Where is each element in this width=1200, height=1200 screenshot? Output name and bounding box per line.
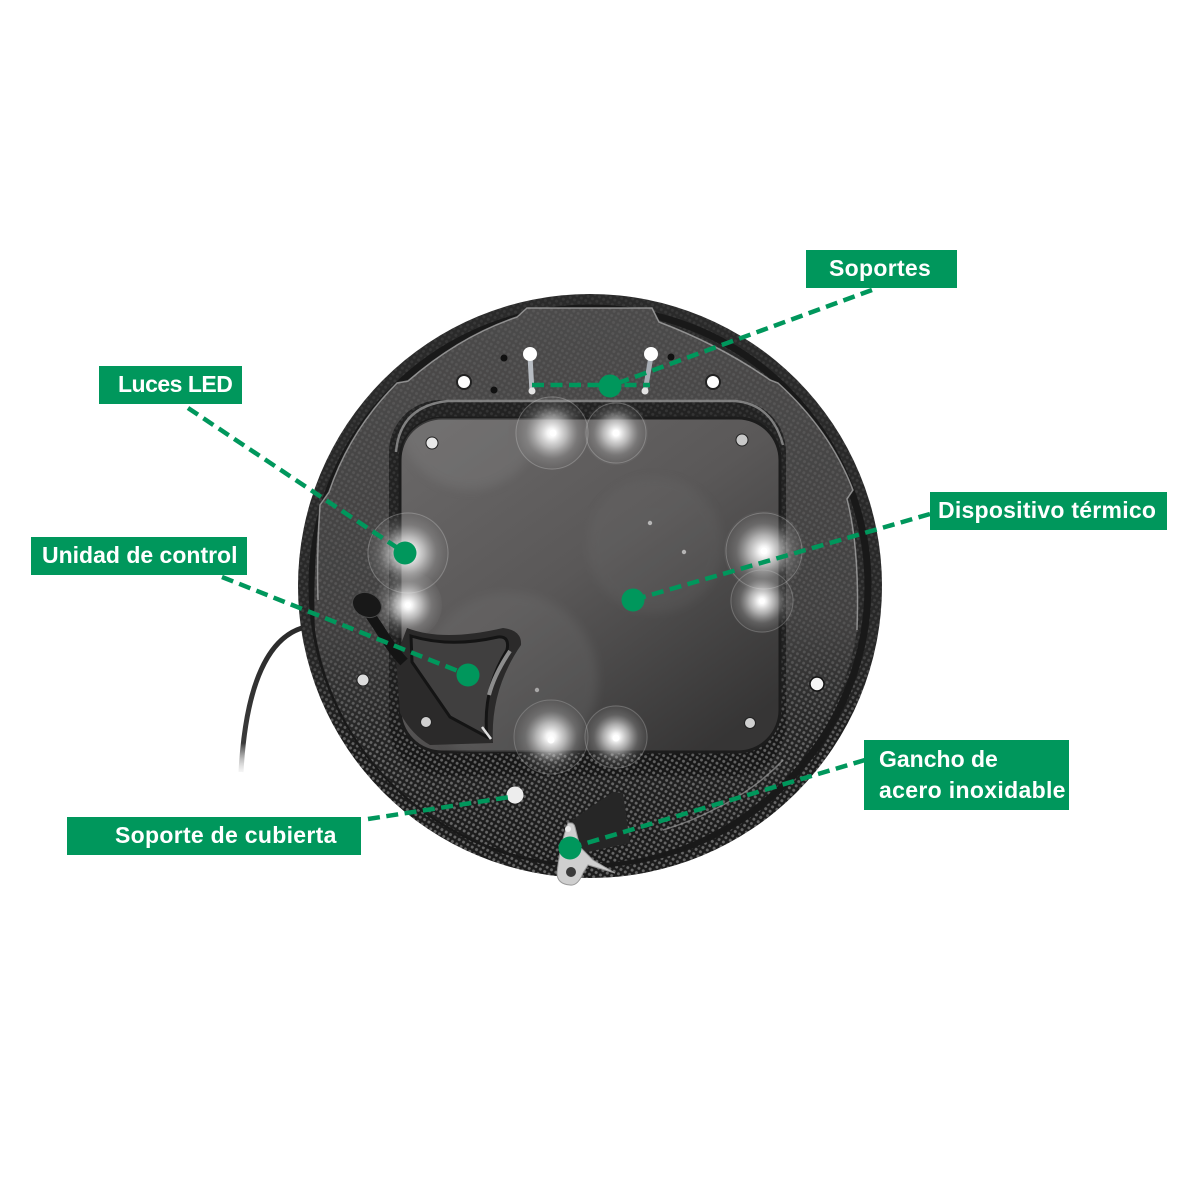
device illustration and leader lines (186, 288, 930, 886)
marker: Luces LED (394, 542, 416, 564)
label: Dispositivo térmico: Dispositivo térmico (938, 497, 1156, 523)
label: Gancho de acero inoxidable: acero inoxidable (879, 777, 1066, 803)
leader: Unidad de control (222, 577, 468, 675)
device: circular base plate (298, 294, 882, 878)
label: Soporte de cubierta (67, 817, 361, 855)
leader: Luces LED (188, 408, 405, 553)
label: Unidad de control (31, 537, 247, 575)
leader: Soporte de cubierta (368, 797, 510, 819)
marker: Soportes (598, 374, 622, 398)
label: Luces LED: Luces LED (118, 371, 232, 397)
device: stainless steel hook (557, 792, 630, 885)
device: top support pegs (490, 347, 674, 394)
device: screws and holes (357, 374, 824, 804)
label: Luces LED (99, 366, 242, 404)
light: bottom left LED (514, 700, 588, 774)
light: left upper LED (367, 512, 449, 594)
label: Soporte de cubierta: Soporte de cubierta (115, 822, 337, 848)
label: Soportes: Soportes (829, 255, 931, 281)
leader: Gancho de acero inoxidable (570, 760, 865, 848)
marker: Gancho de acero inoxidable (558, 836, 582, 860)
marker: Unidad de control (456, 664, 480, 686)
label: Gancho de acero inoxidable (864, 740, 1069, 810)
light: right upper LED (724, 511, 804, 591)
leader: Soportes (532, 290, 872, 386)
device: recessed square heating panel (389, 400, 786, 776)
leader: Dispositivo térmico (633, 514, 930, 600)
lights: LED glow spots (367, 396, 804, 774)
light: top left LED (515, 396, 589, 470)
label: Dispositivo térmico (930, 492, 1167, 530)
marker: Dispositivo térmico (622, 588, 644, 612)
device: control unit housing (348, 588, 521, 745)
icon: power cable (241, 628, 302, 772)
label: Gancho de acero inoxidable: Gancho de (879, 746, 998, 772)
label: Unidad de control: Unidad de control (42, 542, 238, 568)
light: left lower LED (374, 571, 442, 639)
light: bottom right LED (584, 705, 648, 769)
label: Soportes (806, 250, 957, 288)
light: top right LED (584, 401, 648, 465)
light: right lower LED (730, 569, 794, 633)
